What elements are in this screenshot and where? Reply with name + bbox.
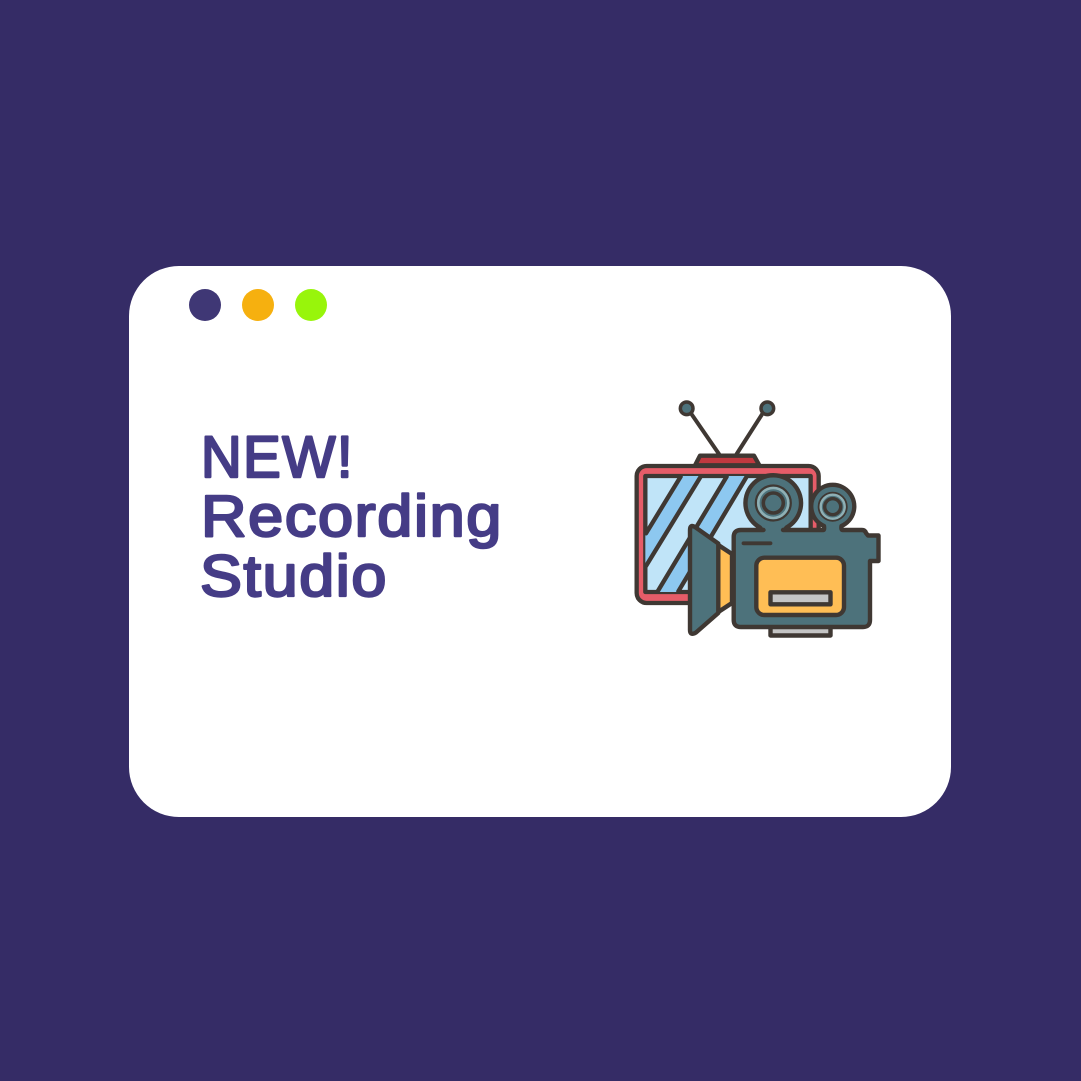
screen stripes — [645, 476, 747, 592]
heading line: Recording: Recording — [201, 484, 503, 549]
lens cone — [718, 545, 732, 612]
icon: video camera — [690, 475, 878, 636]
tv screen — [645, 476, 811, 592]
tv stand top — [695, 456, 759, 465]
icon: television — [637, 402, 819, 603]
dot: amber — [242, 289, 274, 321]
panel: browser window card — [129, 266, 951, 817]
body label line — [744, 541, 770, 545]
dot: indigo — [189, 289, 221, 321]
heading line: NEW!: NEW! — [201, 425, 354, 490]
camera display — [756, 558, 844, 615]
small reel rings — [819, 493, 847, 521]
camera body with reels and side viewfinder — [734, 475, 878, 627]
heading line: Studio: Studio — [200, 544, 388, 609]
big reel rings — [756, 486, 791, 520]
heading: NEW! Recording Studio — [200, 425, 503, 609]
screen stripe lines — [646, 477, 747, 591]
tv frame — [637, 466, 819, 603]
camera foot — [770, 625, 830, 636]
window control dots — [189, 289, 327, 321]
antennas — [691, 413, 763, 454]
antenna knobs — [680, 402, 774, 415]
lens hood — [690, 526, 718, 634]
dot: lime — [295, 289, 327, 321]
icon: television and video camera — [637, 402, 878, 636]
display slot — [770, 592, 830, 604]
